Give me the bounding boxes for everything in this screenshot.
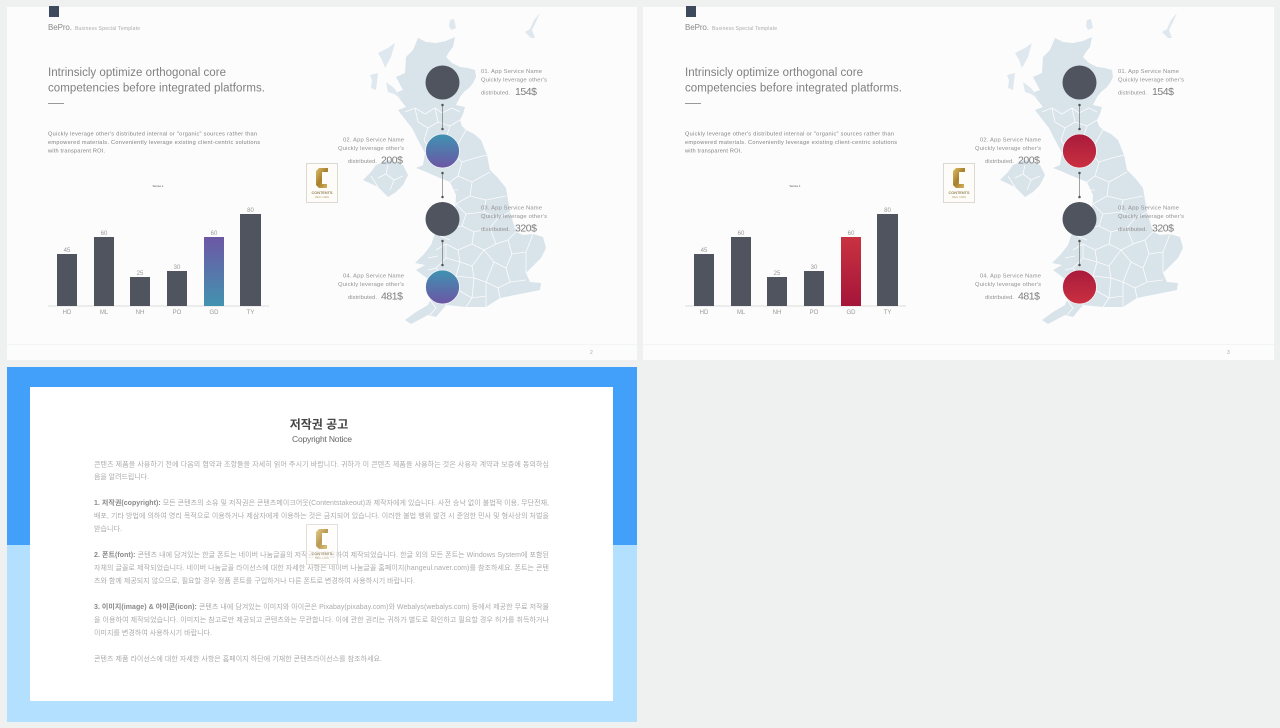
- callout 02: 200$: [381, 154, 403, 166]
- bar chart: [48, 184, 269, 316]
- brand header: [48, 23, 140, 32]
- section 1 copyright: 배포, 기타 방법에 의하여 영리 목적으로 이용하거나 제삼자에게 이용하는 것은 금지되어 있습니다. 이러한 불법 행위 발견 시 준엄한 민사 및 형사상의 처벌을: [94, 511, 550, 520]
- logo stamp: REAL CARE: [315, 557, 329, 560]
- bar chart: 80: [884, 208, 891, 214]
- callout 04: Quickly leverage other's: [975, 282, 1041, 288]
- closing line: 콘텐츠 제품 라이선스에 대한 자세한 사항은 홈페이지 하단에 기재한 콘텐츠라이선스를 참조하세요.: [94, 654, 382, 663]
- bar chart: PO: [810, 310, 819, 316]
- bar chart: 25: [137, 271, 144, 277]
- callout 01: [481, 69, 547, 98]
- callout 02: [338, 138, 404, 166]
- section 3 image and icon: 3. 이미지(image) & 아이콘(icon): 콘텐츠 내에 담겨있는 이미지와 아이콘은 Pixabay(pixabay.com)와 Webalys(webalys.com) 등에서 제공한 무료 저작물: [94, 602, 550, 611]
- callout 04: [338, 274, 404, 302]
- description: with transparent ROI.: [47, 148, 105, 154]
- callout 02: distributed.: [985, 159, 1014, 165]
- callout 04: 481$: [1018, 290, 1040, 302]
- notice title: [290, 416, 352, 444]
- logo stamp: REAL CARE: [315, 196, 329, 199]
- slide 1: map with blue-purple accent: [7, 6, 637, 360]
- bar chart: 60: [101, 231, 108, 237]
- callout 03: 03. App Service Name: [481, 206, 542, 212]
- section 1 copyright: 받습니다.: [94, 524, 122, 533]
- heading: competencies before integrated platforms.: [48, 82, 265, 94]
- bar chart: 25: [774, 271, 781, 277]
- callout 03: [1118, 206, 1184, 234]
- brand header: Business Special Template: [712, 26, 777, 32]
- bar chart: 60: [848, 231, 855, 237]
- callout 02: [975, 138, 1041, 166]
- intro paragraph: 음을 알려드립니다.: [94, 472, 149, 481]
- callout 03: 320$: [515, 222, 537, 234]
- heading: [685, 67, 902, 94]
- callout 03: distributed.: [481, 227, 510, 233]
- callout 03: Quickly leverage other's: [481, 214, 547, 220]
- callout 01: Quickly leverage other's: [481, 78, 547, 84]
- callout 03: distributed.: [1118, 227, 1147, 233]
- bar chart: HD: [63, 310, 72, 316]
- callout 02: Quickly leverage other's: [975, 146, 1041, 152]
- callout 04: 04. App Service Name: [980, 274, 1041, 280]
- section 3 image and icon: 이미지를 변경하여 사용하시기 바랍니다.: [94, 628, 212, 637]
- bar chart: TY: [884, 310, 891, 316]
- heading: Intrinsicly optimize orthogonal core: [685, 67, 863, 79]
- logo stamp: [944, 164, 974, 202]
- callout 02: Quickly leverage other's: [338, 146, 404, 152]
- bar chart: ML: [100, 310, 109, 316]
- callout 02: 200$: [1018, 154, 1040, 166]
- logo stamp: REAL CARE: [952, 196, 966, 199]
- brand header: Business Special Template: [75, 26, 140, 32]
- bar chart: 30: [811, 265, 818, 271]
- bar chart: NH: [136, 310, 144, 316]
- callout 01: [1118, 69, 1184, 98]
- callout 01: 01. App Service Name: [1118, 69, 1179, 75]
- bar chart: Series 1: [789, 184, 801, 188]
- heading: [48, 67, 265, 94]
- callout 03: 320$: [1152, 222, 1174, 234]
- logo stamp: [306, 524, 338, 564]
- logo stamp: CONTENTS: [312, 190, 333, 195]
- slide 2: map with red accent: [643, 6, 1274, 360]
- callout 04: 04. App Service Name: [343, 274, 404, 280]
- callout 03: Quickly leverage other's: [1118, 214, 1184, 220]
- description: Quickly leverage other's distributed internal or "organic" sources rather than: [48, 132, 257, 138]
- page number: 3: [1227, 350, 1230, 356]
- callout 01: distributed.: [481, 90, 510, 96]
- notice body: [94, 460, 550, 663]
- brand square: [686, 6, 696, 17]
- section 2 font: 자체의 글꼴로 제작되었습니다. 네이버 나눔글꼴 라이선스에 대한 자세한 사항은 네이버 나눔글꼴 홈페이지(hangeul.naver.com)를 참조하세요. 폰트는 콘텐: [94, 563, 549, 572]
- bar chart: 60: [211, 231, 218, 237]
- description: empowered materials. Conveniently leverage existing client-centric solutions: [48, 140, 260, 146]
- brand square: [49, 6, 59, 17]
- section 2 font: 츠와 함께 제공되지 않으므로, 필요할 경우 정품 폰트를 구입하거나 다른 폰트로 변경하여 사용하시기 바랍니다.: [94, 576, 415, 585]
- bar chart: 30: [174, 265, 181, 271]
- section 2 font: [94, 550, 549, 585]
- page number: 2: [590, 350, 593, 356]
- callout 04: distributed.: [985, 295, 1014, 301]
- section 3 image and icon: 을 이용하여 제작되었습니다. 이미지는 참고로만 제공되고 콘텐츠와는 무관합니다. 이에 관한 권리는 귀하가 별도로 확인하고 필요할 경우 허가를 취득하거나: [94, 615, 550, 624]
- callout 01: 154$: [515, 86, 537, 98]
- section 1 copyright: [94, 498, 550, 533]
- callout 01: distributed.: [1118, 90, 1147, 96]
- bar chart: NH: [773, 310, 781, 316]
- callout 03: [481, 206, 547, 234]
- description: empowered materials. Conveniently leverage existing client-centric solutions: [685, 140, 897, 146]
- description: Quickly leverage other's distributed internal or "organic" sources rather than: [685, 132, 894, 138]
- description: [47, 132, 260, 154]
- callout 02: distributed.: [348, 159, 377, 165]
- description: [684, 132, 897, 154]
- section 3 image and icon: [94, 602, 550, 637]
- bar chart: GD: [210, 310, 219, 316]
- callout 01: 01. App Service Name: [481, 69, 542, 75]
- callout 04: [975, 274, 1041, 302]
- bar chart: 80: [247, 208, 254, 214]
- map of UK: [1000, 13, 1183, 324]
- section 1 copyright: 1. 저작권(copyright): 모든 콘텐츠의 소유 및 저작권은 콘텐츠메이크어웃(Contentstakeout)과 제작자에게 있습니다. 사전 승낙 없이 불법적 이용, 무단전재,: [94, 498, 549, 507]
- brand header: BePro.: [48, 23, 72, 32]
- bar chart: 45: [701, 248, 708, 254]
- intro paragraph: 콘텐츠 제품을 사용하기 전에 다음의 협약과 조항들을 자세히 읽어 주시기 바랍니다. 귀하가 이 콘텐츠 제품을 사용하는 것은 사용자 계약과 보증에 동의하심: [94, 460, 549, 468]
- bar chart: GD: [846, 310, 856, 316]
- callout 01: Quickly leverage other's: [1118, 78, 1184, 84]
- callout 02: 02. App Service Name: [980, 138, 1041, 144]
- callout 01: 154$: [1152, 86, 1174, 98]
- callout 02: 02. App Service Name: [343, 138, 404, 144]
- notice title: 저작권 공고: [290, 416, 348, 432]
- bar chart: ML: [737, 310, 746, 316]
- bar chart: 60: [738, 231, 745, 237]
- brand header: BePro.: [685, 23, 709, 32]
- bar chart: [685, 184, 906, 316]
- circles and arrows: [426, 66, 460, 304]
- callout 03: 03. App Service Name: [1118, 206, 1179, 212]
- heading: Intrinsicly optimize orthogonal core: [48, 67, 226, 79]
- bar chart: HD: [700, 310, 709, 316]
- intro paragraph: [94, 460, 549, 481]
- slide 3: copyright notice: [7, 367, 637, 722]
- logo stamp: [306, 164, 338, 202]
- notice title: Copyright Notice: [292, 434, 352, 444]
- brand header: [685, 23, 777, 32]
- heading: competencies before integrated platforms.: [685, 82, 902, 94]
- bar chart: 45: [64, 248, 71, 254]
- section 2 font: 2. 폰트(font): 콘텐츠 내에 담겨있는 한글 폰트는 네이버 나눔글꼴의 저작권을 이용하여 제작되었습니다. 한글 외의 모든 폰트는 Windows System에 포함된: [94, 550, 549, 559]
- callout 04: 481$: [381, 290, 403, 302]
- logo stamp: CONTENTS: [948, 190, 970, 195]
- callout 04: Quickly leverage other's: [338, 282, 404, 288]
- logo stamp: CONTENTS: [312, 551, 333, 556]
- circles and arrows: [1062, 66, 1096, 304]
- bar chart: TY: [247, 310, 254, 316]
- bar chart: PO: [173, 310, 182, 316]
- bar chart: Series 1: [152, 184, 164, 188]
- notice card: [30, 387, 613, 701]
- map of UK: [363, 13, 546, 324]
- callout 04: distributed.: [348, 295, 377, 301]
- description: with transparent ROI.: [684, 148, 742, 154]
